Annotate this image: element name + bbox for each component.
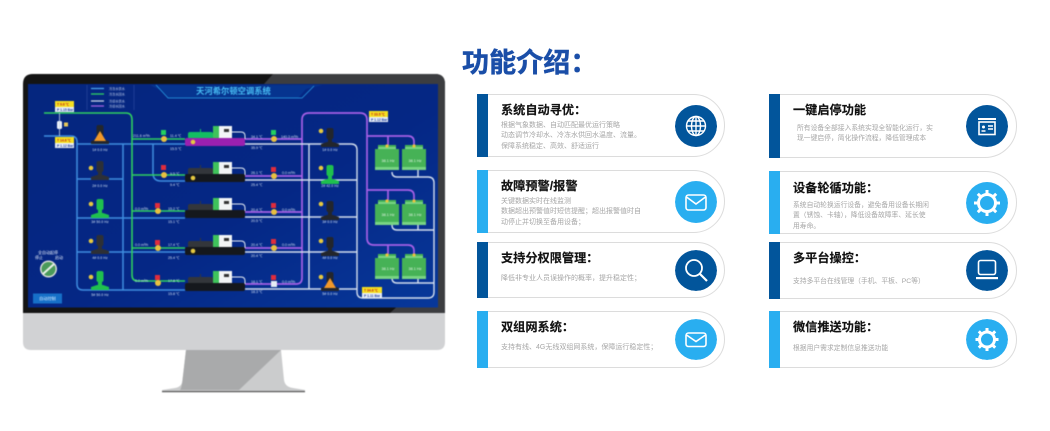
monitor stand <box>162 350 305 392</box>
card description: 用寿命。 <box>793 223 820 230</box>
card description: 所有设备全部接入系统实现全智能化运行，实 <box>797 125 933 132</box>
card title: 故障预警/报警 <box>501 179 578 193</box>
valves and readings: 35.9 ℃ <box>251 146 263 150</box>
left pumps: 5# 50.0 Hz <box>91 293 109 297</box>
card description: 支持多平台在线管理（手机、平板、PC等） <box>793 278 925 285</box>
right pumps: 2# 42.0 Hz <box>321 184 339 188</box>
card description: 数据超出预警值时短信提醒；超出报警值时自 <box>501 208 641 215</box>
auto start-stop switch: 全自动起停 <box>38 249 58 255</box>
cooling towers: 38.1 Hz <box>408 159 422 163</box>
card: equipment rotation <box>769 171 1017 234</box>
monitor chin <box>23 313 445 350</box>
card: dual network <box>477 311 725 368</box>
valves and readings: 25.4 ℃ <box>168 256 180 260</box>
valves and readings: 26.1 ℃ <box>251 171 263 175</box>
card description: 置（锈蚀、卡轴），降低设备故障率、延长使 <box>793 212 926 219</box>
card description: 动态调节冷却水、冷冻水供回水温度、流量。 <box>501 132 641 139</box>
sensor tags: T 33.5 ℃ <box>371 112 386 116</box>
card: fault warning <box>477 170 725 233</box>
icon: gear <box>966 182 1008 224</box>
valves and readings: 20.4 ℃ <box>251 208 263 212</box>
accent bar <box>477 311 488 368</box>
card title: 设备轮循功能： <box>793 181 878 195</box>
card description: 保障系统稳定、高效、舒适运行 <box>501 143 599 150</box>
cooling towers: 38.1 Hz <box>381 213 395 217</box>
icon: control panel <box>966 105 1008 147</box>
valves and readings: 25.4 ℃ <box>251 183 263 187</box>
right pumps: 1# 0.0 Hz <box>322 148 338 152</box>
cooling water pipes <box>245 113 414 284</box>
legend: 冷冻水供水 <box>109 86 126 91</box>
valves and readings: 11.4 ℃ <box>170 134 182 138</box>
green supply pipes <box>44 113 185 281</box>
valves and readings: 17.8 ℃ <box>168 279 180 283</box>
icon: laptop <box>966 250 1008 291</box>
sensor tags: P 1.15 Bar <box>57 108 74 112</box>
valves and readings: 0.0 m³/h <box>282 280 295 284</box>
left pumps: 1# 0.0 Hz <box>92 148 108 152</box>
small flow sensor <box>57 113 68 136</box>
sensor tags: P 1.12 Bar <box>371 118 388 122</box>
card title: 系统自动寻优： <box>501 103 586 117</box>
icon: magnifier <box>675 250 717 291</box>
sensor tags: P 1.11 Bar <box>364 294 381 298</box>
valves and readings: 34.1 ℃ <box>251 135 263 139</box>
return white pipes <box>245 144 434 298</box>
left pumps: 2# 0.0 Hz <box>92 184 108 188</box>
valves and readings: 0.0 m³/h <box>135 279 148 283</box>
sensor tags: T 34.6 ℃ <box>364 288 379 292</box>
card description: 动停止并切换至备用设备； <box>501 219 585 226</box>
valves and readings: 17.4 ℃ <box>168 243 180 247</box>
card description: 根据气象数据、自动匹配最优运行策略 <box>501 122 620 129</box>
monitor body bezel <box>23 74 445 313</box>
card description: 支持有线、4G无线双组网系统，保障运行稳定性； <box>501 344 657 351</box>
legend: 冷冻水回水 <box>109 92 126 96</box>
valves and readings: 15.5 ℃ <box>170 147 182 151</box>
valves and readings: 20.4 ℃ <box>251 243 263 247</box>
card title: 支持分权限管理： <box>501 251 598 265</box>
icon: globe <box>675 105 717 147</box>
right pumps: 3# 0.0 Hz <box>322 220 338 224</box>
sensor tags: P 1.12 Bar <box>57 144 74 148</box>
card description: 降低非专业人员误操作的概率，提升稳定性； <box>501 275 641 282</box>
valves and readings: 0.0 m³/h <box>135 243 148 247</box>
icon: mail <box>675 319 717 360</box>
card title: 双组网系统： <box>501 320 574 334</box>
auto control button: 自动控制 <box>39 295 56 302</box>
card: system auto optimization <box>477 94 725 157</box>
valves and readings: 18.1 ℃ <box>251 280 263 284</box>
sensor tags: T 14.6 ℃ <box>57 138 72 142</box>
valves and readings: 20.5 ℃ <box>251 219 263 223</box>
valves and readings <box>133 130 298 296</box>
valves and readings: 9.5 ℃ <box>170 172 180 176</box>
card: multi-platform control <box>769 242 1017 299</box>
right pumps <box>319 128 339 296</box>
accent bar <box>769 94 780 158</box>
cooling towers <box>375 144 426 279</box>
icon: gear <box>966 319 1008 360</box>
accent bar <box>769 311 780 368</box>
left pumps: 3# 50.0 Hz <box>91 220 109 224</box>
accent bar <box>769 242 780 299</box>
card description <box>793 201 929 230</box>
valves and readings: 0.0 m³/h <box>282 171 295 175</box>
right pumps: 5# 0.0 Hz <box>322 292 338 296</box>
card description <box>501 121 641 150</box>
chilled water pipes <box>44 136 185 290</box>
auto start-stop switch <box>35 249 63 278</box>
card description: 现一键启停，简化操作流程，降低管理成本 <box>797 135 926 142</box>
valves and readings: 0.0 m³/h <box>135 207 148 211</box>
card title: 多平台操控： <box>793 251 866 265</box>
auto start-stop switch: 启动 <box>55 254 63 260</box>
auto start-stop switch: 停止 <box>35 254 43 260</box>
valves and readings: 0.0 m³/h <box>282 243 295 247</box>
card: WeChat push <box>769 311 1017 368</box>
cooling towers: 38.1 Hz <box>381 159 395 163</box>
card description: 关键数据实时在线监测 <box>501 198 571 205</box>
valves and readings: 140.3 m³/h <box>281 135 298 139</box>
screen title banner <box>150 85 322 98</box>
icon: mail <box>675 181 717 223</box>
left pumps: 4# 0.0 Hz <box>92 256 108 260</box>
card: one-key start stop <box>769 94 1017 158</box>
accent bar <box>769 171 780 234</box>
card title: 一键启停功能 <box>793 103 866 117</box>
valves and readings: 9.4 ℃ <box>170 183 180 187</box>
valves and readings: 18.3 ℃ <box>251 290 263 294</box>
cooling towers: 38.1 Hz <box>381 267 395 271</box>
control screen <box>28 84 438 308</box>
valves and readings: 15.8 ℃ <box>168 292 180 296</box>
card description <box>797 124 933 142</box>
card title: 微信推送功能： <box>793 320 878 334</box>
valves and readings: 211.6 m³/h <box>133 134 150 138</box>
card description: 根据用户需求定制信息推送功能 <box>793 345 888 352</box>
auto control button <box>33 294 62 304</box>
left pumps <box>89 125 109 297</box>
legend: 冷却水供水 <box>109 98 126 104</box>
screen title banner: 天河希尔顿空调系统 <box>196 86 272 96</box>
monitor with HVAC control screen <box>22 73 446 393</box>
right pumps: 4# 0.0 Hz <box>322 256 338 260</box>
card description <box>501 197 641 226</box>
accent bar <box>477 94 488 157</box>
card description: 系统自动轮换运行设备，避免备用设备长期闲 <box>793 202 929 209</box>
cooling towers: 38.1 Hz <box>408 267 422 271</box>
chillers <box>185 126 245 291</box>
heading: 功能介绍： <box>462 48 598 78</box>
card: permission management <box>477 242 725 298</box>
legend <box>87 85 134 110</box>
valves and readings: 15.1 ℃ <box>168 220 180 224</box>
legend: 冷却水回水 <box>109 104 126 108</box>
cooling towers: 38.1 Hz <box>408 213 422 217</box>
valves and readings: 20.4 ℃ <box>251 254 263 258</box>
accent bar <box>477 170 488 233</box>
valves and readings: 15.2 ℃ <box>168 207 180 211</box>
valves and readings: 0.0 m³/h <box>282 208 295 212</box>
accent bar <box>477 242 488 298</box>
sensor tags: T 9.6 ℃ <box>57 102 70 106</box>
sensor tags <box>55 101 388 298</box>
